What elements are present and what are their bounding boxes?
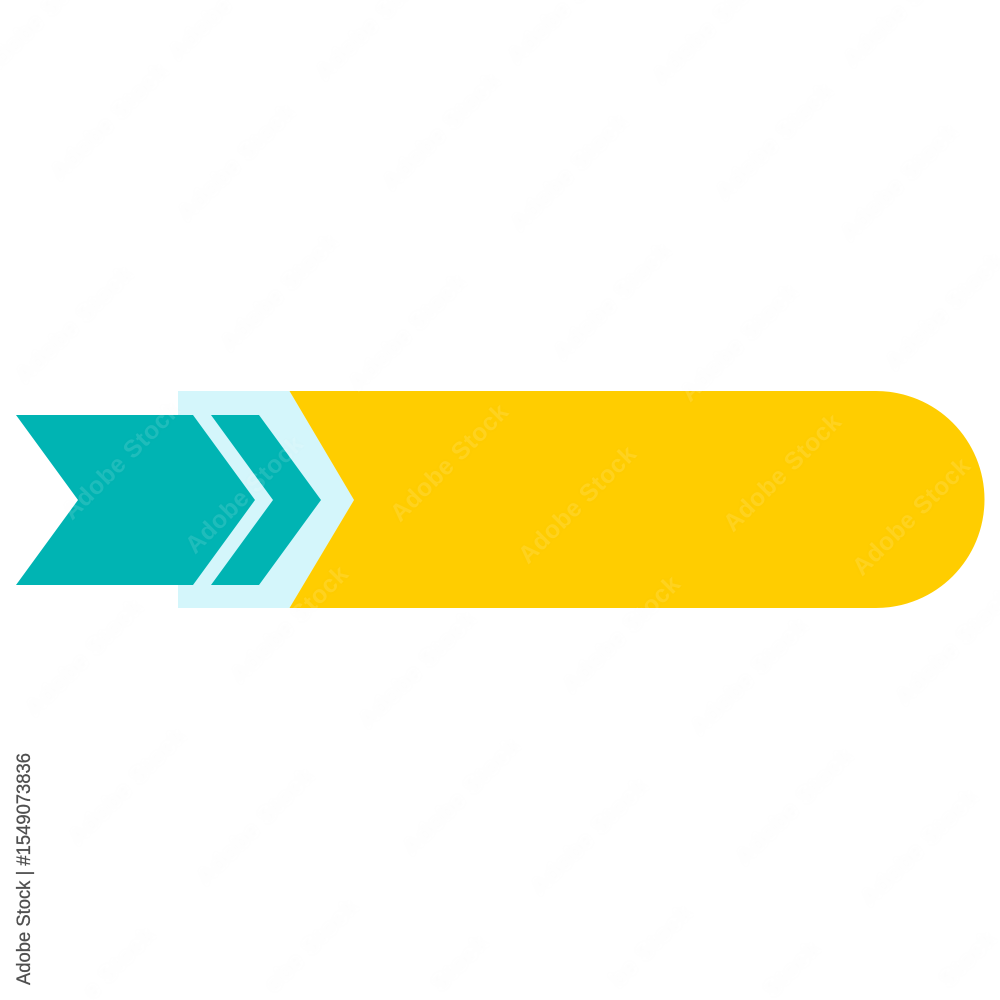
stock watermark pattern: Adobe Stock bbox=[548, 237, 677, 366]
stock watermark pattern: Adobe Stock bbox=[385, 398, 514, 527]
stock watermark pattern: Adobe Stock bbox=[191, 762, 320, 891]
stock watermark pattern: Stock bbox=[426, 929, 494, 997]
stock watermark pattern: Adobe Stock bbox=[353, 605, 482, 734]
stock watermark pattern: Adobe Stock bbox=[397, 732, 526, 861]
icon: small teal chevron bbox=[211, 415, 321, 585]
stock watermark pattern: Adobe Stock bbox=[730, 742, 859, 871]
stock watermark pattern: Adobe Stock bbox=[718, 408, 847, 537]
stock watermark pattern: Adobe Stock bbox=[847, 452, 976, 581]
stock watermark pattern: Adobe Stock bbox=[180, 430, 309, 559]
stock watermark pattern: Adobe Stock bbox=[20, 593, 149, 722]
stock watermark pattern: obe Stock bbox=[259, 893, 364, 998]
stock watermark pattern: Adobe Stock bbox=[225, 560, 354, 689]
stock watermark pattern: Adobe Stock bbox=[343, 268, 472, 397]
panel: pale blue backing bbox=[178, 391, 354, 608]
stock watermark pattern: Adobe Stock bbox=[855, 783, 984, 912]
stock watermark pattern: Adobe Stock bbox=[835, 118, 964, 247]
icon: large teal chevron bbox=[16, 415, 255, 585]
stock watermark pattern: Adobe Stock bbox=[45, 57, 174, 186]
stock watermark pattern: Adobe Stock bbox=[675, 278, 804, 407]
stock watermark pattern: Adobe Stock bbox=[63, 722, 192, 851]
stock watermark pattern: Adobe Stock bbox=[10, 260, 139, 389]
stock watermark pattern: Adobe Stock bbox=[525, 772, 654, 901]
stock watermark pattern: Adobe Stock bbox=[557, 570, 686, 699]
stock watermark pattern: Adobe Stock bbox=[172, 98, 301, 227]
stock watermark pattern: Adobe Stock bbox=[215, 228, 344, 357]
stock watermark pattern: Adobe Stock bbox=[710, 77, 839, 206]
stock credit text: Adobe Stock | #1549073836 bbox=[13, 753, 35, 985]
stock watermark pattern: be Stock bbox=[604, 899, 698, 993]
stock watermark pattern: Adobe Stock bbox=[377, 67, 506, 196]
panel: yellow rounded label bbox=[290, 391, 984, 608]
stock watermark pattern: Adobe Stock bbox=[685, 612, 814, 741]
banner graphic bbox=[16, 391, 984, 608]
stock watermark pattern: Adobe Stock bbox=[513, 440, 642, 569]
stock watermark pattern: Adobe Stock bbox=[505, 108, 634, 237]
stock watermark pattern: Adobe Stock bbox=[57, 396, 186, 525]
